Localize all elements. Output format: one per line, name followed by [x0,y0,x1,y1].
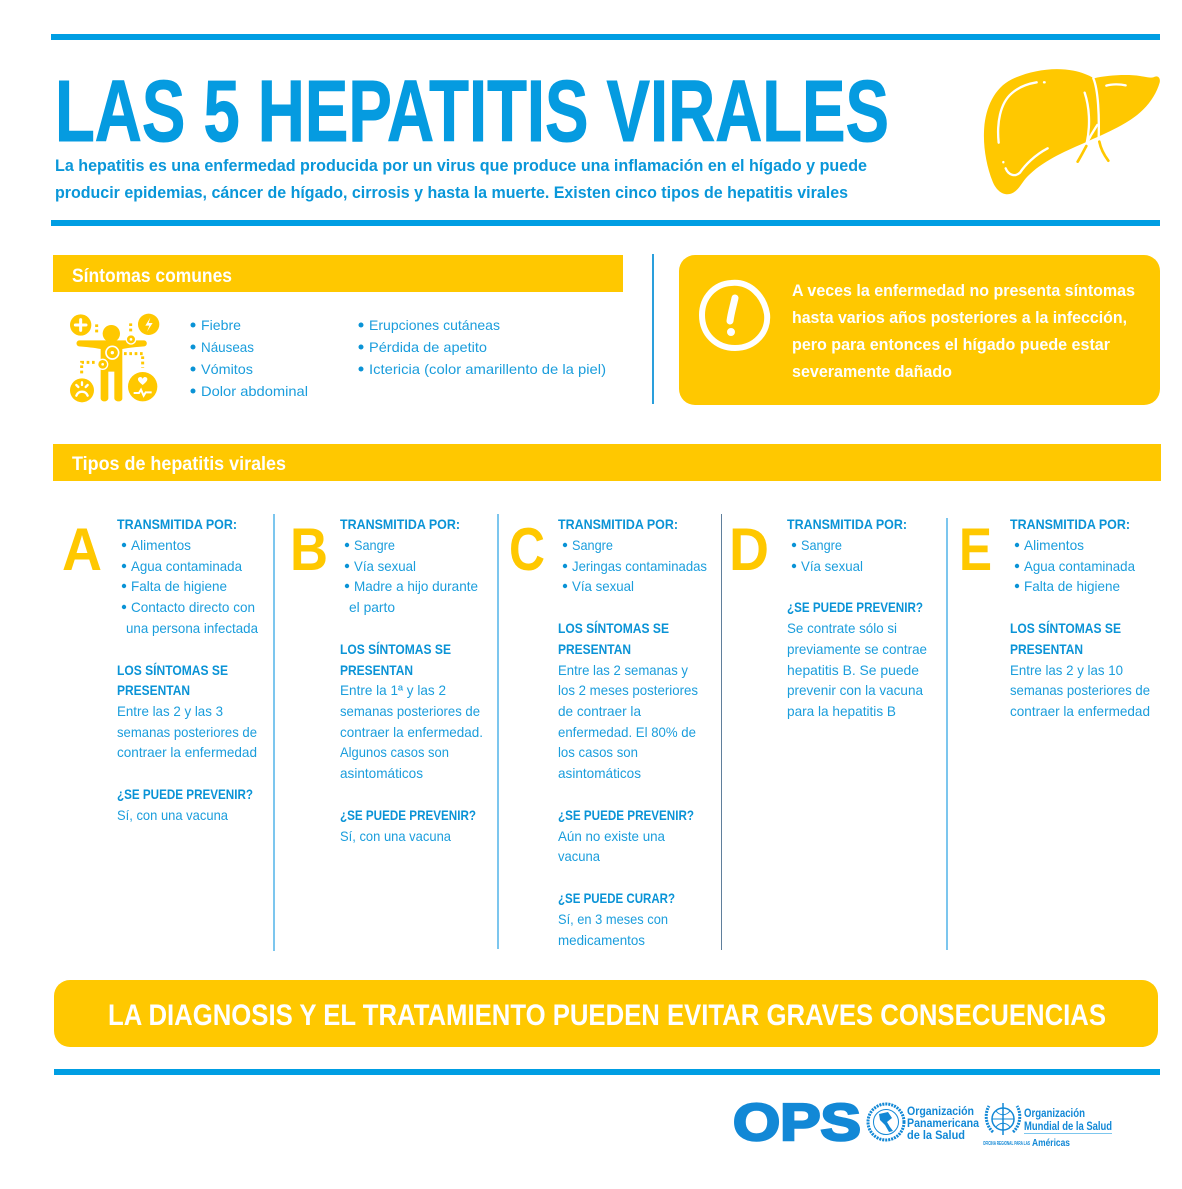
panel: hepatitis E: LOS SÍNTOMAS SE [1010,620,1121,636]
symptoms list: column 2: Pérdida de apetito [369,339,487,355]
panel: hepatitis C: enfermedad. El 80% de [558,724,696,740]
panel: hepatitis C: Entre las 2 semanas y [558,662,688,678]
panel: hepatitis E: Falta de higiene [1024,578,1120,594]
symptoms list: column 1: Fiebre [201,317,241,333]
emblem: PAHO [868,1104,904,1140]
text: Organización Panamericana de la Salud: de la Salud [907,1128,965,1142]
panel: hepatitis C: medicamentos [558,932,645,948]
symptoms list: column 1: Dolor abdominal [201,383,308,399]
panel: hepatitis D: Sangre [801,537,842,553]
symptoms list: column 1: Náuseas [201,339,254,355]
letter E: E [959,516,992,583]
panel: hepatitis A: Sí, con una vacuna [117,807,228,823]
panel: hepatitis B: asintomáticos [340,765,423,781]
panel: hepatitis B [290,516,483,844]
panel: hepatitis C: los casos son [558,744,638,760]
panel: hepatitis C [509,516,707,948]
panel: hepatitis B: Entre la 1ª y las 2 [340,682,446,698]
panel: hepatitis A: contraer la enfermedad [117,744,257,760]
panel: hepatitis C: vacuna [558,848,600,864]
panel: hepatitis A: Alimentos [131,537,191,553]
panel: hepatitis B: contraer la enfermedad. [340,724,483,740]
panel: hepatitis B: PRESENTAN [340,662,413,678]
letter A: A [62,516,102,583]
symptoms list: column 2: Ictericia (color amarillento de la piel) [369,361,606,377]
panel: hepatitis D: previamente se contrae [787,641,927,657]
panel: hepatitis A: LOS SÍNTOMAS SE [117,662,228,678]
heading: síntomas comunes [53,255,623,292]
callout: sin síntomas: hasta varios años posteriores a la infección, [792,308,1127,327]
text: Organización Panamericana de la Salud: Panamericana [907,1116,979,1130]
symptoms list: column 2 [358,317,606,377]
panel: hepatitis B: el parto [349,599,395,615]
panel: hepatitis A [62,516,258,823]
panel: hepatitis C: LOS SÍNTOMAS SE [558,620,669,636]
symptoms list: column 1 [190,317,308,399]
panel: hepatitis A: semanas posteriores de [117,724,257,740]
symptoms list: column 2: Erupciones cutáneas [369,317,500,333]
title: LAS 5 HEPATITIS VIRALES [55,63,889,160]
panel: hepatitis B: TRANSMITIDA POR: [340,516,460,532]
panel: hepatitis E: Alimentos [1024,537,1084,553]
panel: hepatitis B: ¿SE PUEDE PREVENIR? [340,807,476,823]
panel: hepatitis C: PRESENTAN [558,641,631,657]
panel: hepatitis C: Vía sexual [572,578,634,594]
intro text [55,156,867,202]
icon: exclamation [702,283,767,348]
text: Organización Panamericana de la Salud: Organización [907,1104,974,1118]
text: Organización Mundial de la Salud: OFICINA REGIONAL PARA LAS [983,1141,1030,1147]
panel: hepatitis D: Vía sexual [801,558,863,574]
text: Organización Mundial de la Salud: Organización [1024,1106,1085,1120]
letter B: B [290,516,328,583]
heading: tipos de hepatitis virales: Tipos de hepatitis virales [72,454,286,475]
panel: hepatitis E: Entre las 2 y las 10 [1010,662,1123,678]
panel: hepatitis A: Agua contaminada [131,558,242,574]
panel: hepatitis B: Sangre [354,537,395,553]
panel: hepatitis B: LOS SÍNTOMAS SE [340,641,451,657]
intro text: producir epidemias, cáncer de hígado, cirrosis y hasta la muerte. Existen cinco tipos de hepatitis virales [55,183,848,202]
icon: body symptoms [70,314,159,402]
text: Organización Panamericana de la Salud [907,1104,979,1142]
heading: tipos de hepatitis virales [53,444,1161,481]
panel: hepatitis A: Contacto directo con [131,599,255,615]
panel: hepatitis C: ¿SE PUEDE CURAR? [558,890,675,906]
panel: hepatitis C: de contraer la [558,703,641,719]
text: Organización Mundial de la Salud: Américas [1032,1138,1070,1149]
panel: hepatitis C: Aún no existe una [558,828,665,844]
heading: síntomas comunes: Síntomas comunes [72,266,232,287]
letter D: D [729,516,769,583]
panel: hepatitis C: los 2 meses posteriores [558,682,698,698]
panel: hepatitis A: PRESENTAN [117,682,190,698]
banner: diagnosis [54,980,1158,1047]
logos [733,1094,1112,1152]
panel: hepatitis A: ¿SE PUEDE PREVENIR? [117,786,253,802]
panel: hepatitis A: una persona infectada [126,620,258,636]
panel: hepatitis B: Vía sexual [354,558,416,574]
panel: hepatitis D: prevenir con la vacuna [787,682,923,698]
panel: hepatitis A: Falta de higiene [131,578,227,594]
panel: hepatitis E: semanas posteriores de [1010,682,1150,698]
callout: sin síntomas: severamente dañado [792,362,952,381]
panel: hepatitis E: Agua contaminada [1024,558,1135,574]
panel: hepatitis A: TRANSMITIDA POR: [117,516,237,532]
panel: hepatitis C: Jeringas contaminadas [572,558,707,574]
panel: hepatitis C: ¿SE PUEDE PREVENIR? [558,807,694,823]
callout: sin síntomas: pero para entonces el hígado puede estar [792,335,1110,354]
panel: hepatitis D: ¿SE PUEDE PREVENIR? [787,599,923,615]
letter C: C [509,516,545,583]
text: Organización Mundial de la Salud: Mundial de la Salud [1024,1119,1112,1133]
callout: sin síntomas: A veces la enfermedad no presenta síntomas [792,281,1135,300]
panel: hepatitis D: para la hepatitis B [787,703,896,719]
panel: hepatitis E: contraer la enfermedad [1010,703,1150,719]
panel: hepatitis C: asintomáticos [558,765,641,781]
panel: hepatitis C: Sí, en 3 meses con [558,911,668,927]
panel: hepatitis D: Se contrate sólo si [787,620,897,636]
panel: hepatitis C: Sangre [572,537,613,553]
panel: hepatitis E: TRANSMITIDA POR: [1010,516,1130,532]
panel: hepatitis B: semanas posteriores de [340,703,480,719]
intro text: La hepatitis es una enfermedad producida por un virus que produce una inflamación en el hígado y puede [55,156,867,175]
panel: hepatitis B: Sí, con una vacuna [340,828,451,844]
icon: liver [984,69,1160,194]
panel: hepatitis C: TRANSMITIDA POR: [558,516,678,532]
text: Organización Mundial de la Salud [983,1106,1112,1149]
emblem: WHO [986,1103,1020,1135]
panel: hepatitis D [729,516,927,719]
panel: hepatitis E [959,516,1150,719]
panel: hepatitis A: Entre las 2 y las 3 [117,703,223,719]
symptoms list: column 1: Vómitos [201,361,253,377]
panel: hepatitis B: Algunos casos son [340,744,449,760]
panel: hepatitis D: hepatitis B. Se puede [787,662,919,678]
logo: OPS: OPS [733,1094,861,1152]
panel: hepatitis D: TRANSMITIDA POR: [787,516,907,532]
callout: sin síntomas [679,255,1160,405]
panel: hepatitis E: PRESENTAN [1010,641,1083,657]
panel: hepatitis B: Madre a hijo durante [354,578,478,594]
